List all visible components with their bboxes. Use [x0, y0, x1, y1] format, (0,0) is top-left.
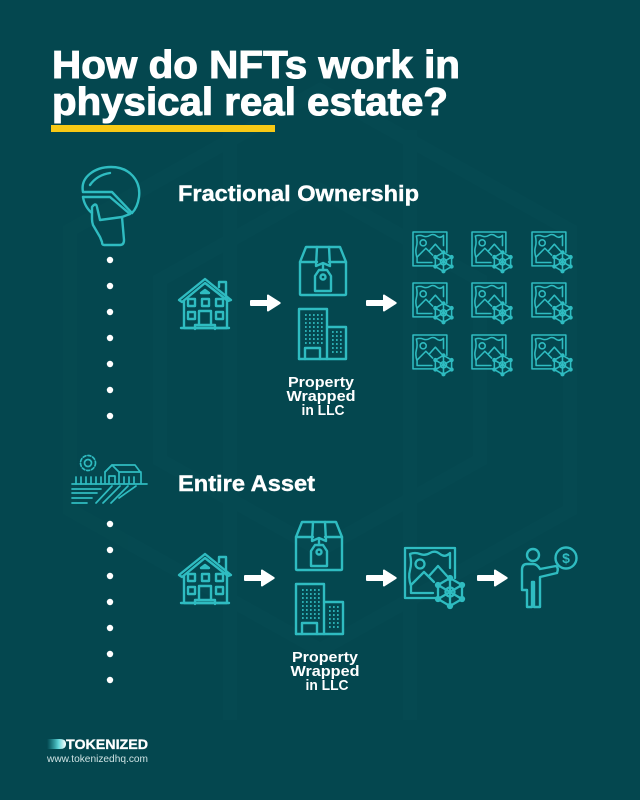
- arrow: [366, 294, 397, 312]
- icon: box with tag: [296, 522, 342, 570]
- dotted connector: top: [107, 257, 113, 419]
- label: Property Wrapped in LLC: Property: [292, 650, 358, 666]
- title underline: [51, 125, 275, 132]
- label: Property Wrapped in LLC: in LLC: [306, 678, 349, 694]
- label: Property Wrapped in LLC: Property: [288, 375, 354, 391]
- logo: TOKENIZED: [66, 737, 148, 752]
- icon: farm: [72, 456, 147, 503]
- label: Property Wrapped in LLC: Wrapped: [286, 389, 355, 405]
- icon: person with coin: [522, 548, 576, 607]
- icon: person with coin: $: [562, 550, 570, 566]
- label: Property Wrapped in LLC: Wrapped: [290, 664, 359, 680]
- icon: house: [179, 554, 231, 604]
- heading: Fractional Ownership: Fractional Ownership: [178, 181, 419, 206]
- dotted connector: bottom: [107, 521, 113, 683]
- title: physical real estate?: [52, 81, 448, 124]
- title: How do NFTs work in: [52, 44, 460, 87]
- logo: [46, 737, 148, 765]
- label: Property Wrapped in LLC: in LLC: [302, 403, 345, 419]
- arrow: [477, 570, 508, 586]
- title: [52, 44, 460, 124]
- icon: building: [296, 584, 343, 634]
- icon: house: [179, 279, 231, 329]
- icon: NFT image: [405, 548, 464, 608]
- icon: helmet with hand: [83, 167, 139, 245]
- heading: Entire Asset: Entire Asset: [178, 471, 316, 496]
- arrow: [244, 570, 275, 586]
- arrow: [366, 570, 397, 586]
- background pattern: [70, 90, 570, 720]
- logo: www.tokenizedhq.com: [46, 754, 148, 765]
- icon: building: [299, 309, 346, 359]
- icon: box with tag: [300, 247, 346, 295]
- NFT grid: [413, 232, 572, 376]
- arrow: [250, 294, 281, 312]
